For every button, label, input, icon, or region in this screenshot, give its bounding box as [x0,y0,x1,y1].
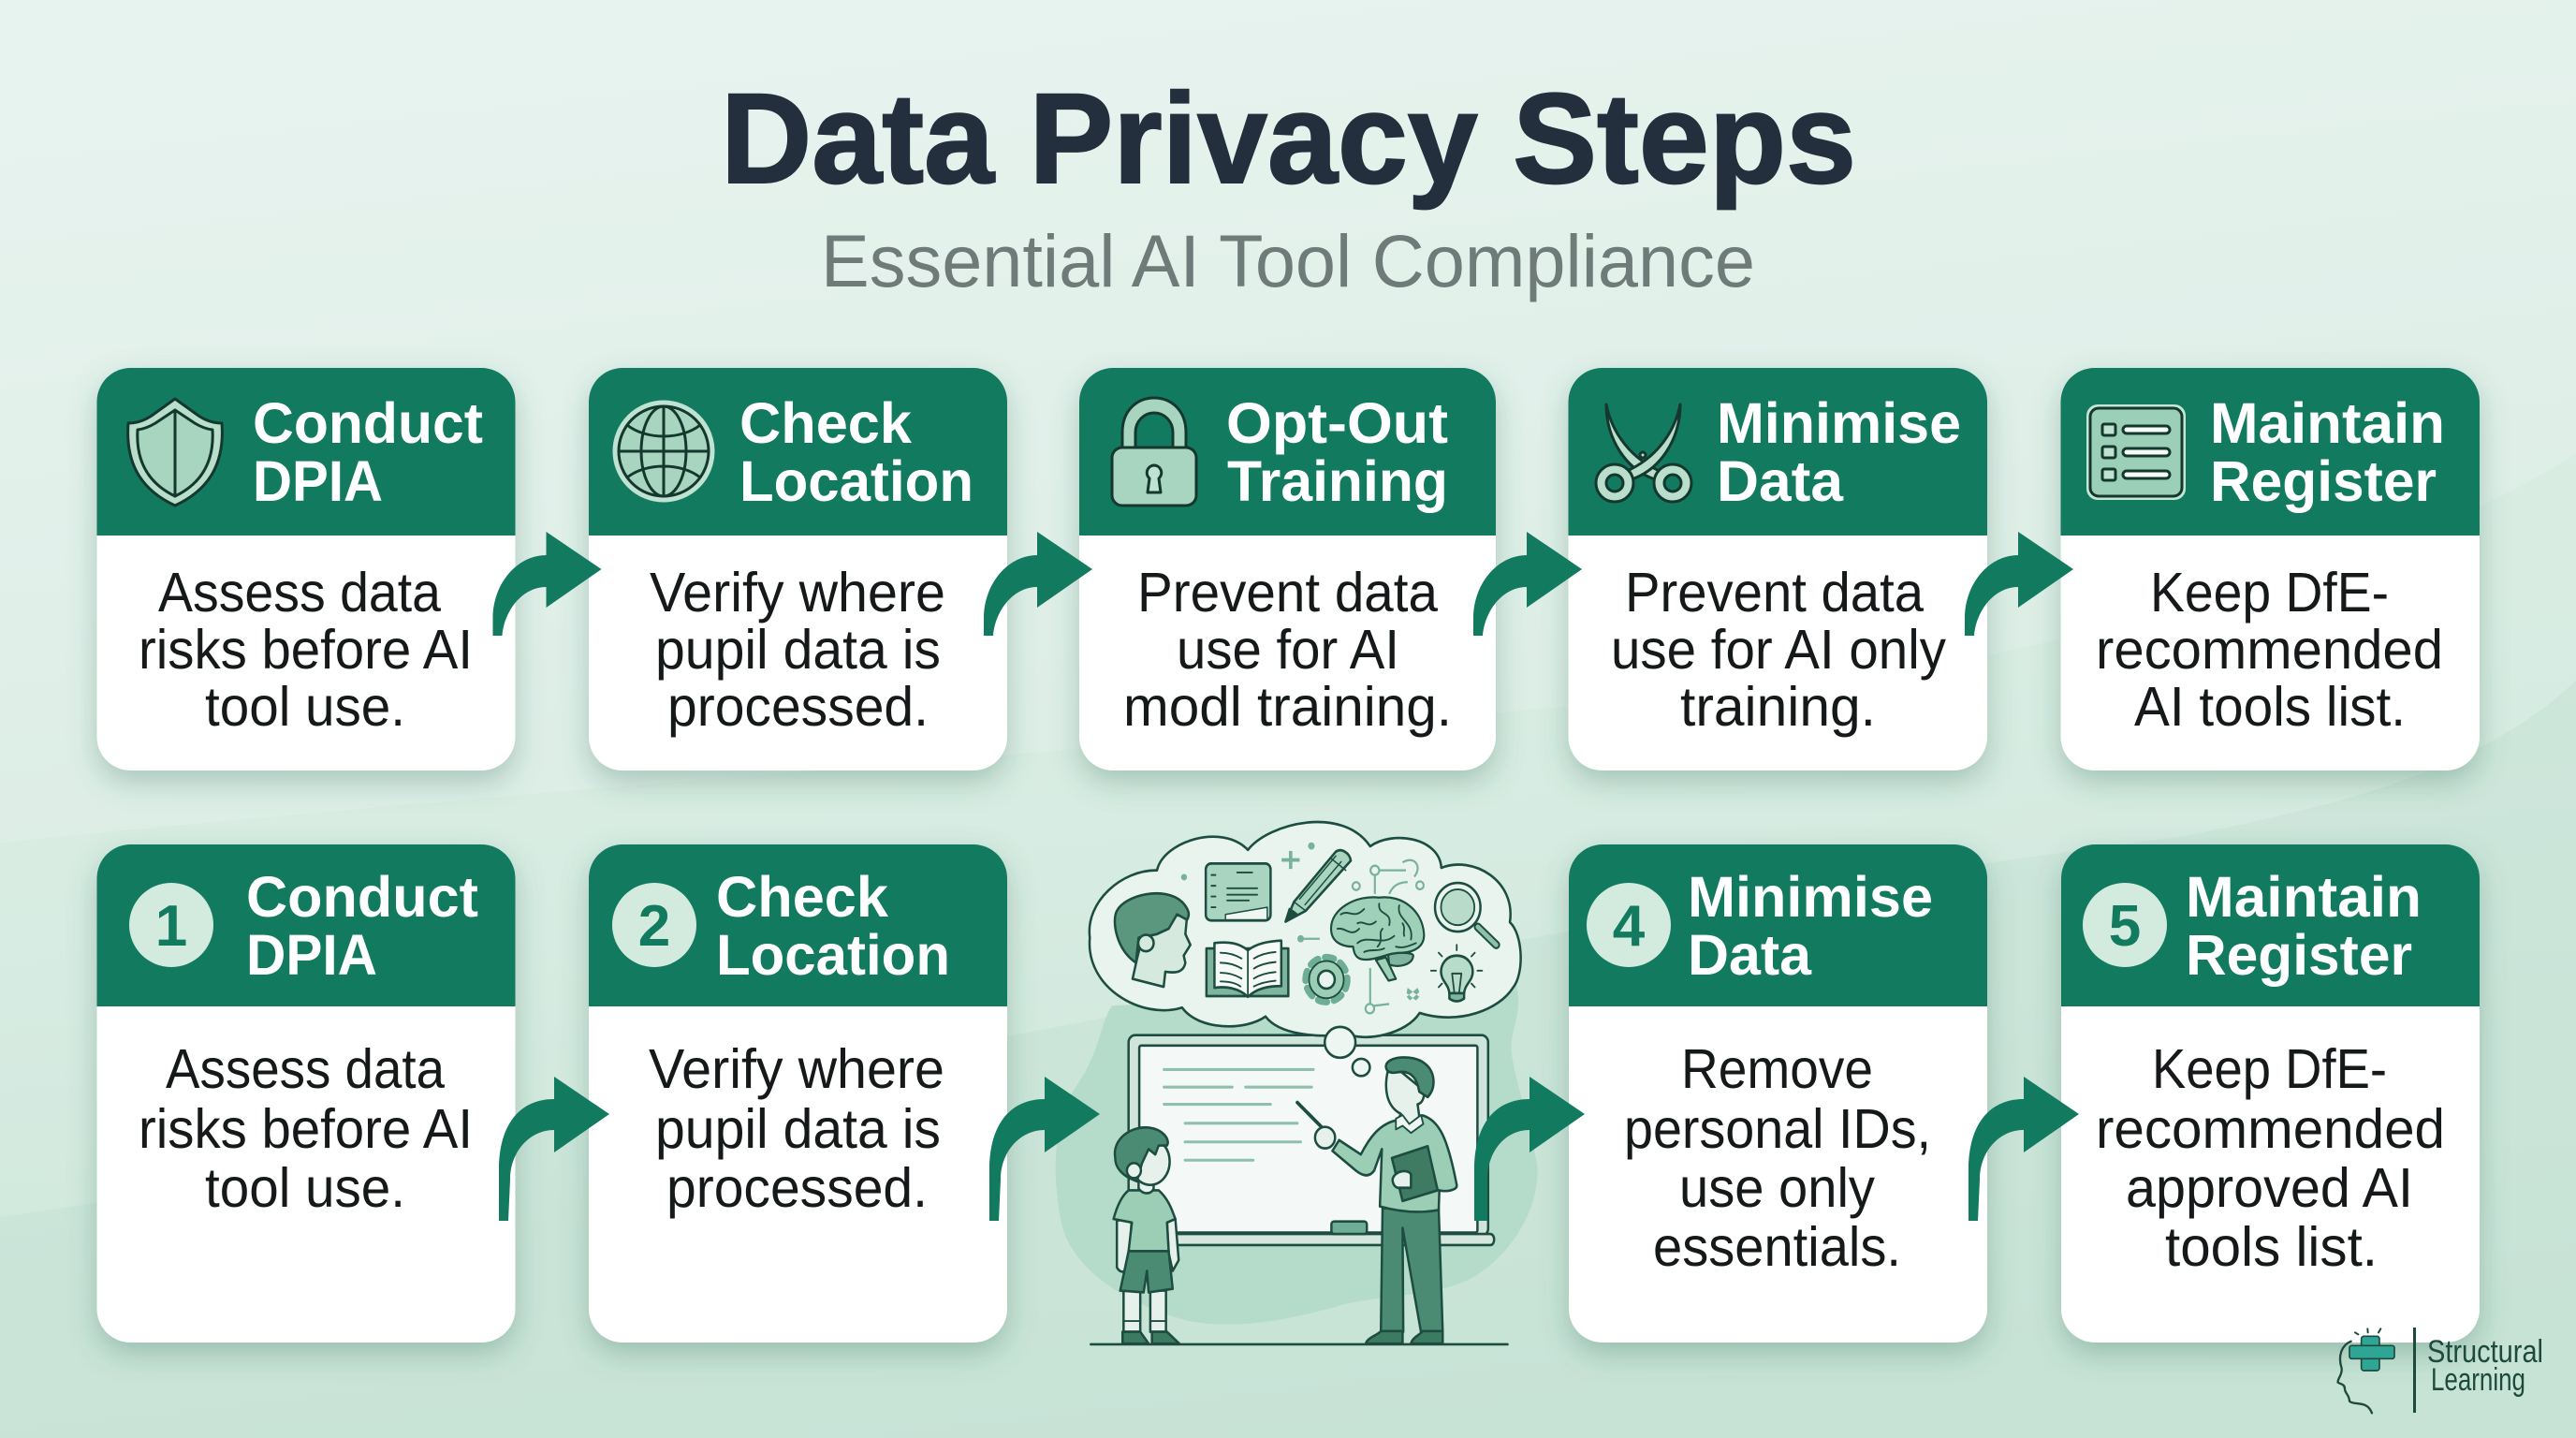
body text: approved AI [2126,1157,2413,1219]
heading: Location [739,449,973,513]
body text: training. [1680,676,1876,738]
heading: Opt-Out [1226,391,1448,455]
icon: light bulb [1431,945,1482,1002]
whiteboard [1129,1035,1494,1245]
heading: Training [1227,449,1448,513]
body text: recommended [2096,619,2443,681]
body text: AI tools list. [2134,676,2406,738]
background blob [1056,984,1538,1325]
heading: DPIA [253,449,383,513]
card: 5 Maintain Register (bottom row) [2061,844,2480,1343]
number badge 5 [2083,883,2167,967]
number badge 2: 2 [638,894,670,959]
body text: Remove [1681,1038,1873,1100]
body text [139,1038,473,1219]
heading: Maintain [2186,865,2422,929]
heading: DPIA [246,923,377,987]
thought bubbles [1325,1027,1369,1076]
card: Opt-Out Training (top row) [1079,368,1496,770]
body text [1624,1038,1931,1278]
card header [589,368,1007,536]
card header [2061,368,2480,536]
body text: Prevent data [1137,562,1438,624]
body text: processed. [667,676,929,738]
number badge 4: 4 [1613,894,1646,959]
ground line [1090,1341,1508,1347]
icon: register list [2086,404,2186,500]
figure: teacher [1297,1057,1456,1343]
card: Check Location (top row) [589,368,1007,770]
heading [253,391,483,513]
icon: padlock [1112,398,1196,506]
body text: Assess data [158,562,441,624]
icon: globe [615,403,712,500]
heading: Conduct [253,391,483,455]
heading [1688,865,1933,987]
logo divider [2413,1328,2416,1413]
icon: open book [1207,941,1288,997]
heading [1717,391,1961,513]
figure: pupil [1114,1127,1179,1343]
heading: Data [1717,449,1844,513]
heading: Register [2186,923,2412,987]
heading: Data [1688,923,1812,987]
card header [2061,844,2480,1006]
illustration: teacher and pupil at whiteboard with thought cloud [1056,822,1538,1344]
body text: Verify where [650,562,945,624]
arrow: bottom row step 2 to illustration [989,1077,1100,1221]
heading: Check [716,865,888,929]
body text: use only [1679,1157,1875,1219]
icon: decorative sparkles [1181,843,1419,1001]
logo: Structural Learning [2338,1328,2543,1413]
card header [97,368,515,536]
card: 4 Minimise Data (bottom row) [1569,844,1987,1343]
body text: tool use. [205,676,405,738]
card: Maintain Register (top row) [2061,368,2480,770]
heading [716,865,950,987]
body text: Verify where [649,1038,944,1100]
title: Data Privacy Steps [721,67,1856,211]
body text: risks before AI [139,619,473,681]
body text: tool use. [205,1157,405,1219]
icon: gear [1306,958,1347,1002]
body text [649,1038,944,1219]
heading: Maintain [2210,391,2445,455]
icon: network nodes [1298,860,1424,1013]
body text: risks before AI [139,1098,473,1160]
body text: modl training. [1123,676,1452,738]
number badge 5: 5 [2109,894,2141,959]
body text: Prevent data [1625,562,1924,624]
card header [97,844,515,1006]
icon: brain [1331,897,1424,981]
heading [2210,391,2445,513]
number badge 1: 1 [155,894,187,959]
logo icon: head with cross [2338,1328,2394,1413]
number badge 4 [1587,883,1671,967]
body text: Keep DfE- [2150,562,2389,624]
body text: Assess data [166,1038,445,1100]
body text: personal IDs, [1624,1098,1931,1160]
body text [1611,562,1946,738]
subtitle: Essential AI Tool Compliance [821,219,1755,302]
arrow: bottom row step 1 to 2 [499,1077,609,1221]
card: Minimise Data (top row) [1569,368,1987,770]
heading [1226,391,1448,513]
body text: use for AI only [1611,619,1946,681]
body text: processed. [666,1157,928,1219]
card header [1079,368,1496,536]
body text: pupil data is [655,619,941,681]
body text: use for AI [1177,619,1399,681]
thought cloud [1090,822,1521,1037]
body text: recommended [2096,1098,2445,1160]
heading: Register [2210,449,2437,513]
icon: shield [128,399,222,506]
arrow: top row step 3 to 4 [1473,532,1582,636]
body text: tools list. [2165,1216,2378,1278]
logo wordmark [2427,1334,2543,1398]
card: 1 Conduct DPIA (bottom row) [97,844,515,1343]
logo wordmark: Learning [2431,1362,2525,1398]
body text [2096,1038,2445,1278]
body text [1123,562,1452,738]
icon: magnifying glass [1435,883,1496,945]
body text: pupil data is [655,1098,941,1160]
heading [246,865,478,987]
body text [650,562,945,738]
arrow: bottom row step 4 to 5 [1969,1077,2079,1221]
heading: Location [716,923,950,987]
heading: Minimise [1717,391,1961,455]
icon: child head profile [1115,893,1191,987]
heading [739,391,973,513]
heading [2186,865,2422,987]
heading: Conduct [246,865,478,929]
number badge 2 [612,883,696,967]
heading: Minimise [1688,865,1933,929]
body text [2096,562,2443,738]
arrow: top row step 2 to 3 [984,532,1092,636]
card header [1569,368,1987,536]
body text: Keep DfE- [2152,1038,2387,1100]
icon: scissors [1596,404,1691,502]
card header [1569,844,1987,1006]
arrow: bottom row illustration to step 4 [1474,1077,1585,1221]
arrow: top row step 1 to 2 [492,532,601,636]
card header [589,844,1007,1006]
number badge 1 [129,883,213,967]
card: 2 Check Location (bottom row) [589,844,1007,1343]
icon: pencil [1285,850,1351,921]
body text: essentials. [1653,1216,1901,1278]
icon: note card [1206,863,1270,920]
logo wordmark: Structural [2427,1334,2543,1370]
arrow: top row step 4 to 5 [1965,532,2073,636]
card: Conduct DPIA (top row) [97,368,515,770]
heading: Check [739,391,912,455]
body text [139,562,473,738]
